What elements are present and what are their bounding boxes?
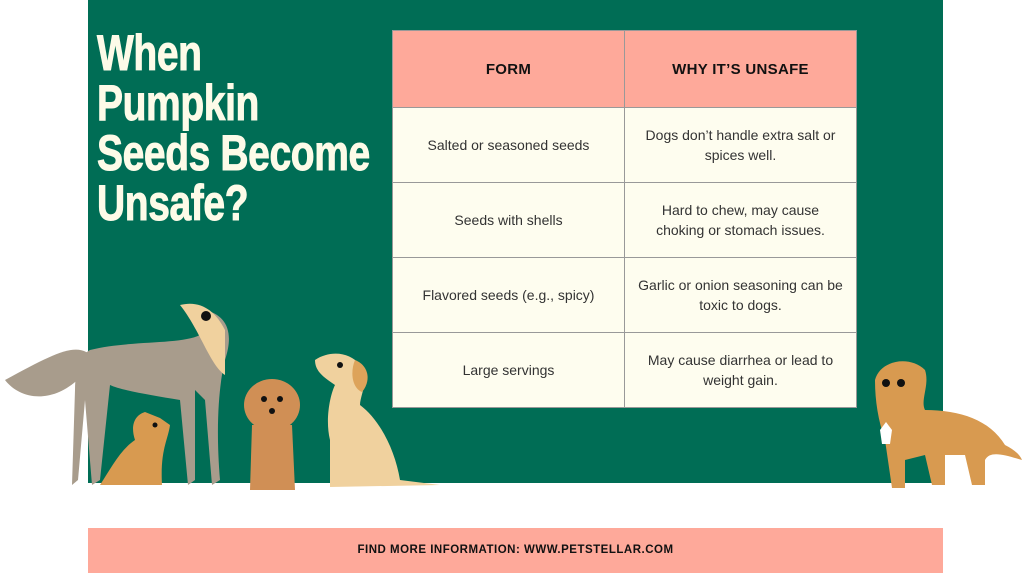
dog: labrador puppy: [315, 354, 440, 487]
title: When: [97, 25, 202, 81]
table: Dogs don’t handle extra salt or spices well.: [646, 127, 835, 163]
dog: golden retriever: [875, 361, 1022, 488]
title: [96, 25, 370, 231]
table: [392, 30, 857, 408]
footer: [88, 528, 943, 573]
table: WHY IT’S UNSAFE: [672, 60, 809, 78]
dog: greyhound: [5, 304, 229, 485]
table: Seeds with shells: [454, 212, 563, 228]
footer: FIND MORE INFORMATION: WWW.PETSTELLAR.COM: [357, 544, 674, 556]
table: Hard to chew, may cause choking or stomach issues.: [656, 202, 825, 238]
table: May cause diarrhea or lead to weight gain.: [648, 352, 833, 388]
dog: poodle: [244, 379, 300, 490]
title: Unsafe?: [97, 175, 248, 231]
title: Seeds Become: [97, 125, 370, 181]
table: Salted or seasoned seeds: [428, 137, 589, 153]
table: Flavored seeds (e.g., spicy): [423, 287, 594, 303]
table: Large servings: [463, 362, 554, 378]
green panel: [88, 0, 943, 483]
dog: small chihuahua: [100, 412, 170, 485]
table: FORM: [486, 60, 531, 78]
table: Garlic or onion seasoning can be toxic to dogs.: [638, 277, 843, 313]
title: Pumpkin: [97, 75, 259, 131]
